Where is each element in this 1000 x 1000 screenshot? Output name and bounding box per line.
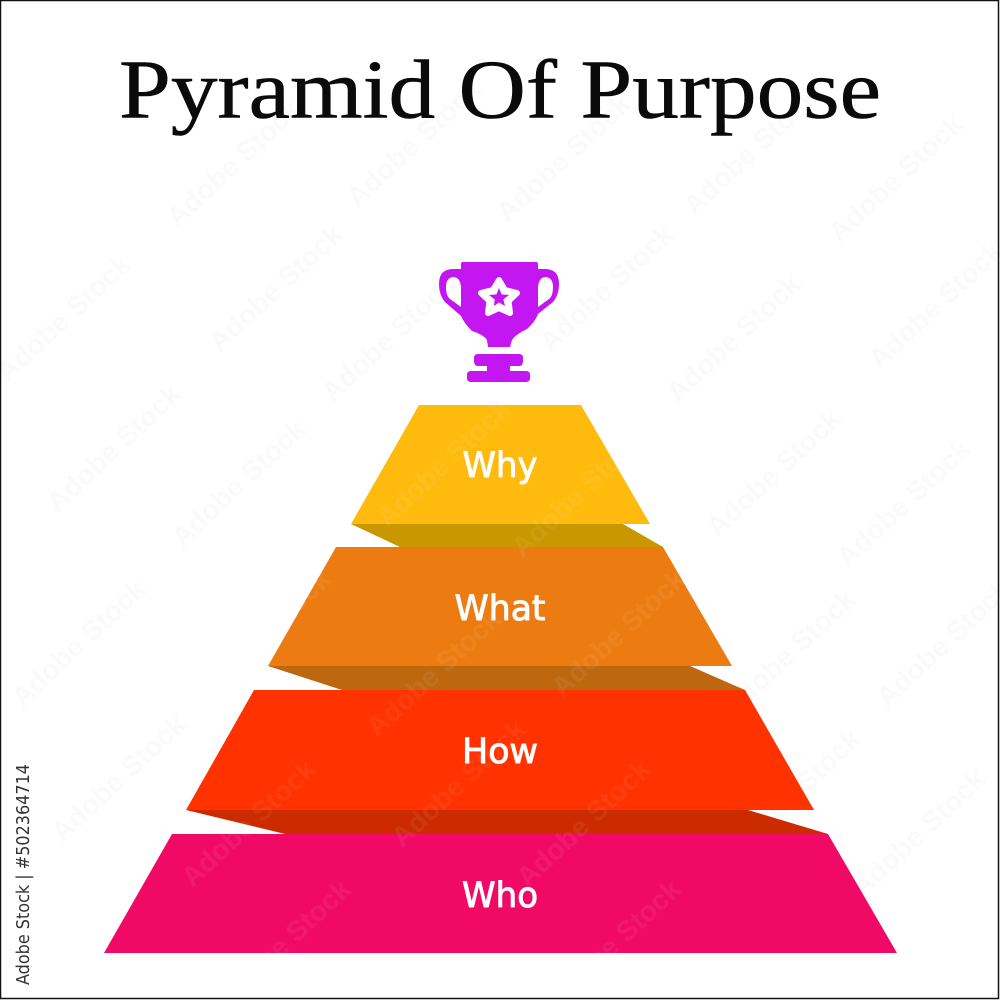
infographic canvas: Adobe Stock <box>505 423 652 563</box>
infographic canvas: Adobe Stock <box>360 603 507 743</box>
infographic canvas: Adobe Stock <box>165 413 312 553</box>
infographic canvas: Adobe Stock <box>175 753 322 893</box>
infographic canvas: Adobe Stock <box>700 403 847 543</box>
label: How: How <box>462 732 538 772</box>
infographic canvas: Adobe Stock <box>822 108 969 248</box>
label: What: What <box>454 589 546 629</box>
infographic canvas: Adobe Stock <box>720 723 867 863</box>
icon: trophy base <box>467 354 530 382</box>
shadow: under How tier <box>186 810 828 834</box>
label: Who: Who <box>462 876 538 916</box>
infographic canvas: Adobe Stock <box>160 93 307 233</box>
infographic canvas: Adobe Stock <box>5 573 152 713</box>
infographic canvas: Adobe Stock <box>45 708 192 848</box>
infographic canvas: Adobe Stock <box>490 88 637 228</box>
infographic canvas: Adobe Stock <box>370 393 517 533</box>
infographic canvas: Adobe Stock <box>715 583 862 723</box>
pyramid tier: What <box>268 547 732 666</box>
icon: trophy cup <box>439 262 559 347</box>
infographic canvas: Adobe Stock <box>660 268 807 408</box>
shadow: under What tier <box>268 666 745 690</box>
pyramid tier: How <box>186 690 814 810</box>
infographic canvas: Adobe Stock <box>340 73 487 213</box>
infographic canvas: Adobe Stock <box>40 378 187 518</box>
shadow: under Why tier <box>351 524 663 547</box>
label: Why: Why <box>462 446 538 486</box>
icon: purple trophy <box>439 262 559 382</box>
icon: trophy star <box>481 280 517 313</box>
infographic canvas: Adobe Stock <box>315 268 462 408</box>
infographic canvas: Adobe Stock <box>830 433 977 573</box>
infographic canvas: Adobe Stock <box>510 753 657 893</box>
infographic canvas: Adobe Stock <box>202 218 349 358</box>
title: Pyramid Of Purpose <box>119 44 881 136</box>
infographic canvas: Adobe Stock <box>533 218 680 358</box>
infographic canvas: Adobe Stock <box>385 713 532 853</box>
stock credit: Adobe Stock | #502364714 <box>13 764 34 985</box>
infographic canvas: Adobe Stock <box>190 563 337 703</box>
pyramid tier: Who <box>104 834 897 953</box>
infographic canvas: Adobe Stock <box>677 81 824 221</box>
pyramid tier: Why <box>351 405 650 524</box>
infographic canvas: Adobe Stock <box>845 763 992 903</box>
infographic canvas: Adobe Stock <box>545 563 692 703</box>
